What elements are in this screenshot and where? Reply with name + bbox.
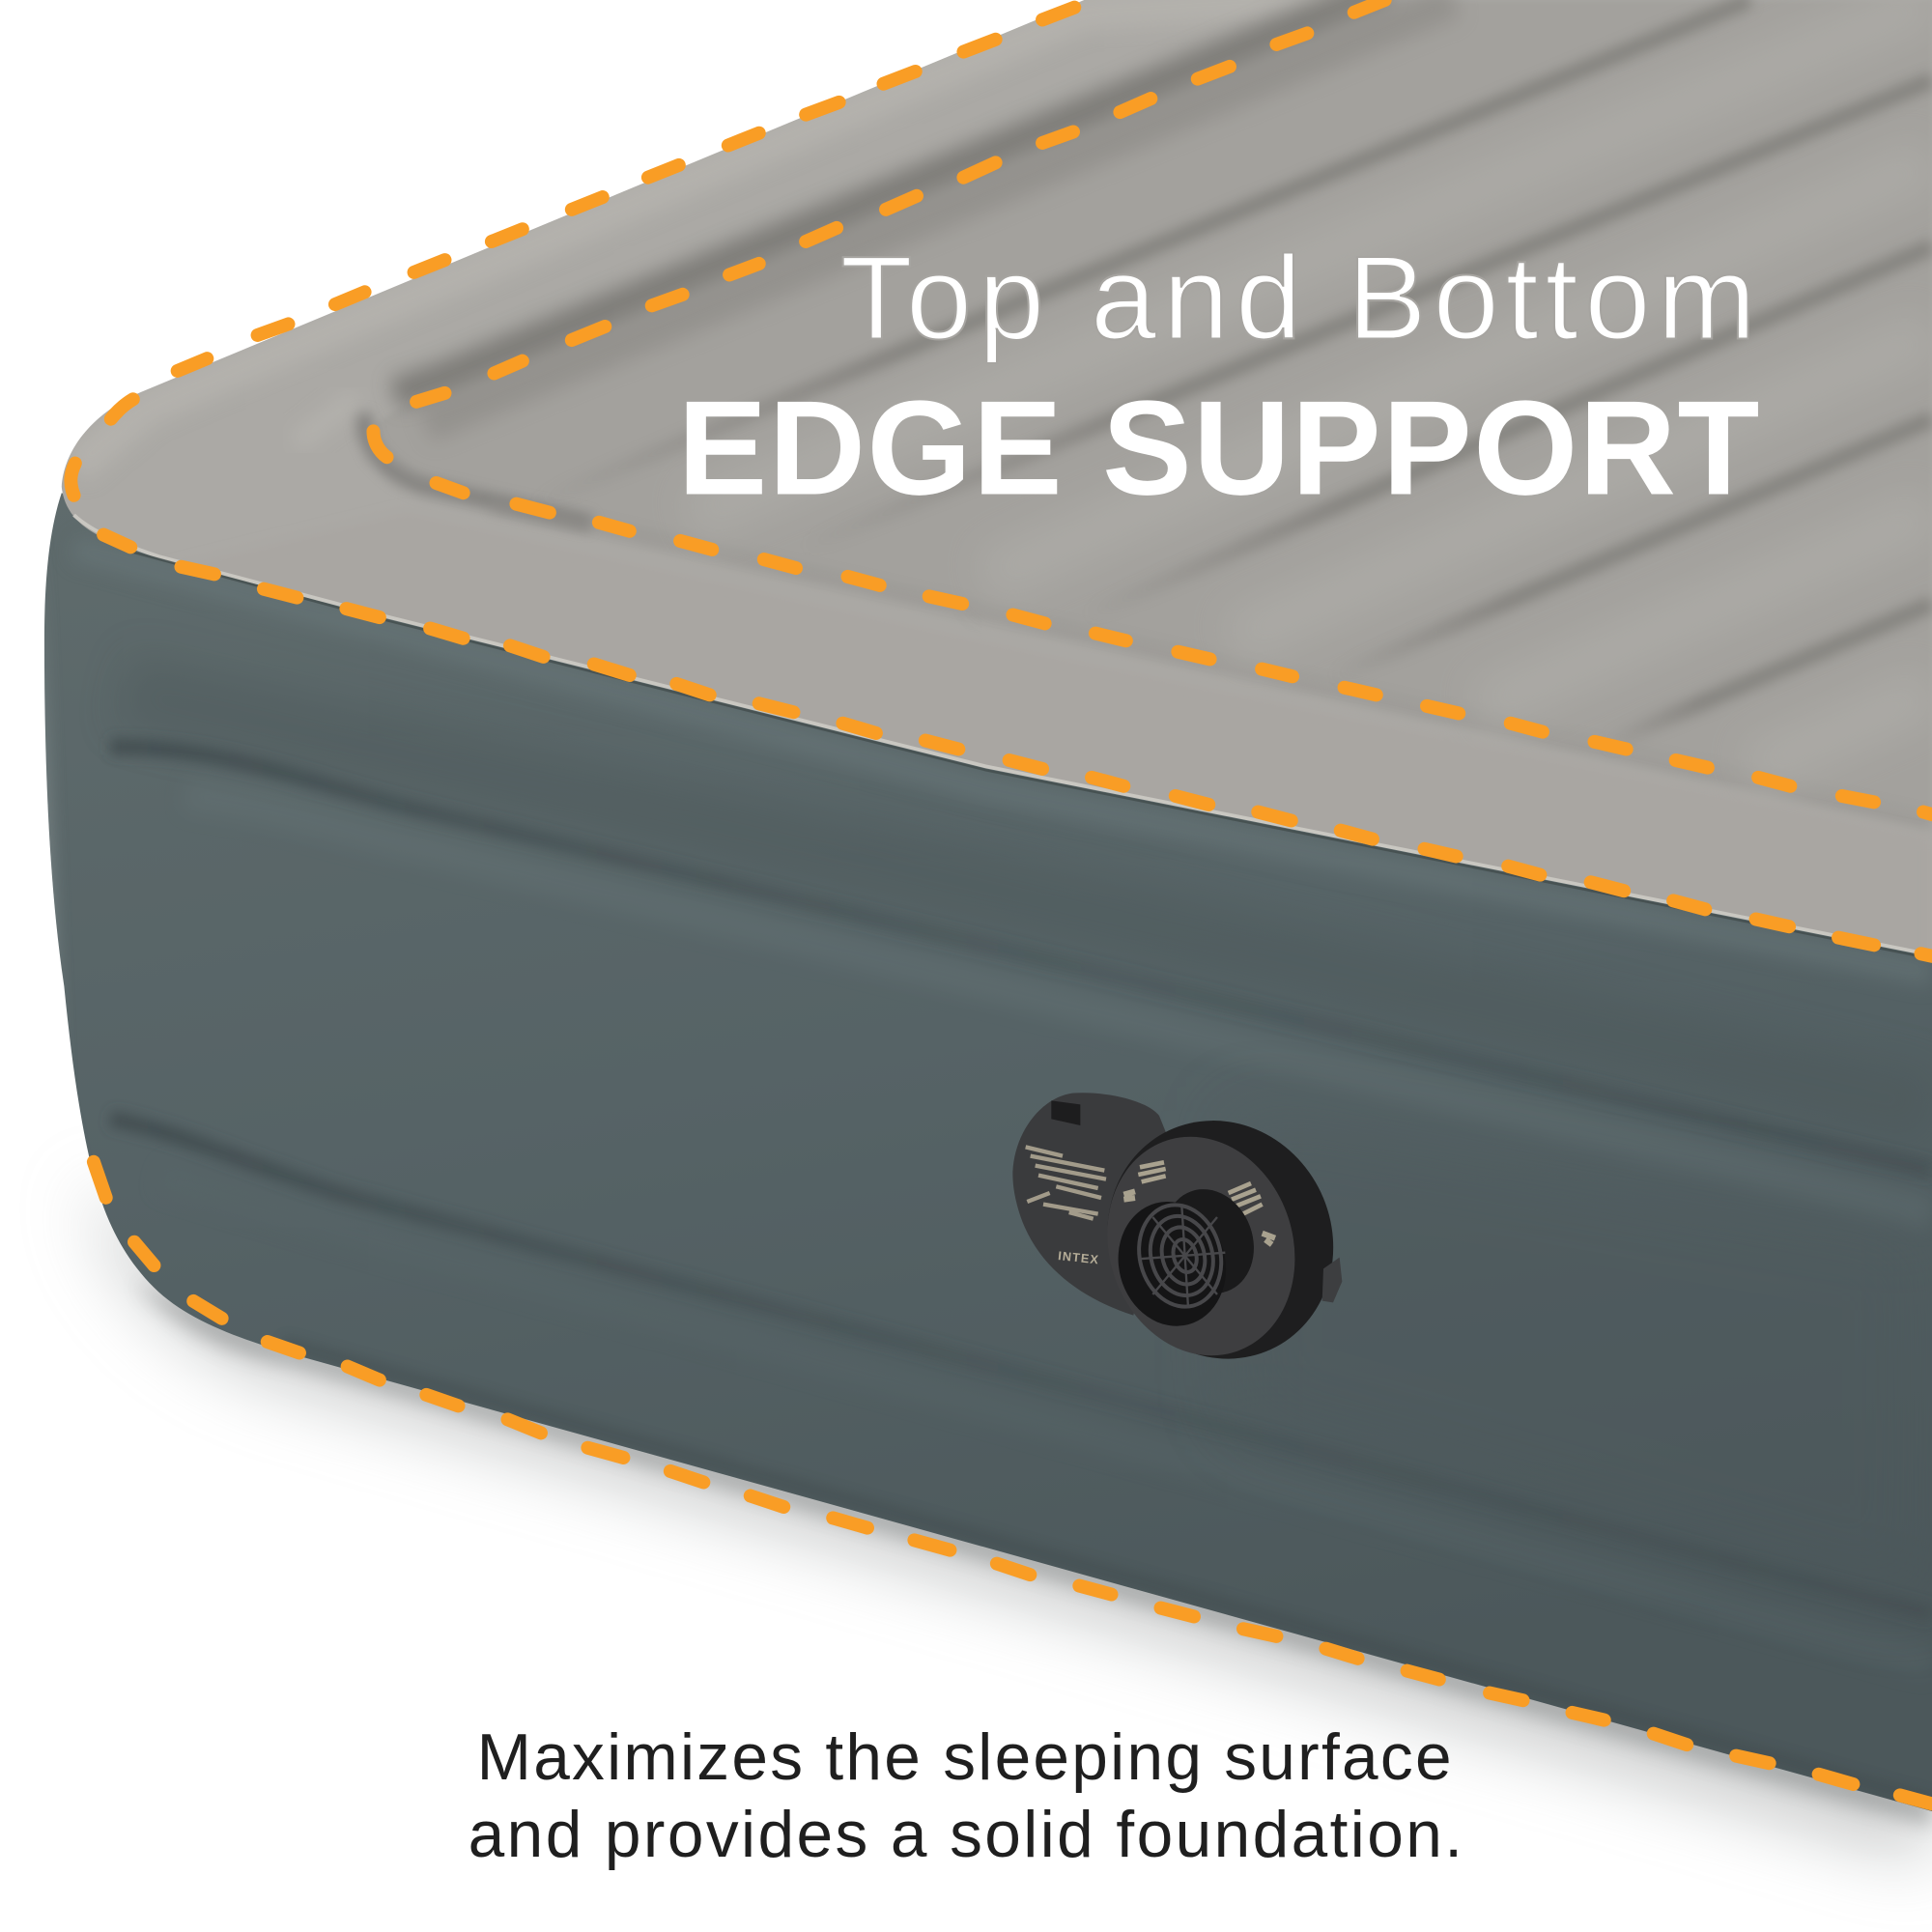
inner top edge dashes	[416, 0, 1385, 402]
bottom edge dashes	[94, 1162, 1932, 1804]
air pump valve	[1012, 1083, 1372, 1396]
pump grille	[1104, 1189, 1239, 1338]
caption: and provides a solid foundation.	[469, 1799, 1463, 1871]
dial markings	[1123, 1162, 1275, 1244]
rib highlights	[690, 0, 1932, 770]
lower rim cover	[124, 511, 1932, 985]
heading: top and bottom: Top and Bottom	[840, 232, 1756, 364]
mattress top surface	[62, 0, 1932, 985]
pump tab	[1051, 1100, 1080, 1125]
brand mark: INTEX	[1058, 1249, 1099, 1266]
pump back plate	[1012, 1093, 1169, 1316]
mattress side panel	[35, 493, 1932, 1811]
rib creases	[648, 0, 1753, 457]
top seam dashes	[103, 535, 1932, 956]
caption: Maximizes the sleeping surface	[477, 1721, 1452, 1794]
inner sleeping surface	[352, 0, 1932, 827]
pump outer body	[1068, 1083, 1372, 1396]
mattress floor shadow	[86, 1182, 1932, 1861]
inner bottom edge dashes	[373, 431, 1932, 814]
pump side switch	[1322, 1258, 1342, 1302]
outer top edge dashes	[71, 8, 1074, 496]
corner dimple highlight	[296, 397, 357, 443]
caption	[469, 1721, 1463, 1871]
pump knob	[1151, 1177, 1268, 1306]
recess shading	[394, 0, 1386, 394]
pump dial	[1079, 1112, 1322, 1380]
pump label marks	[1026, 1147, 1106, 1219]
heading: edge support: EDGE SUPPORT	[678, 373, 1759, 523]
